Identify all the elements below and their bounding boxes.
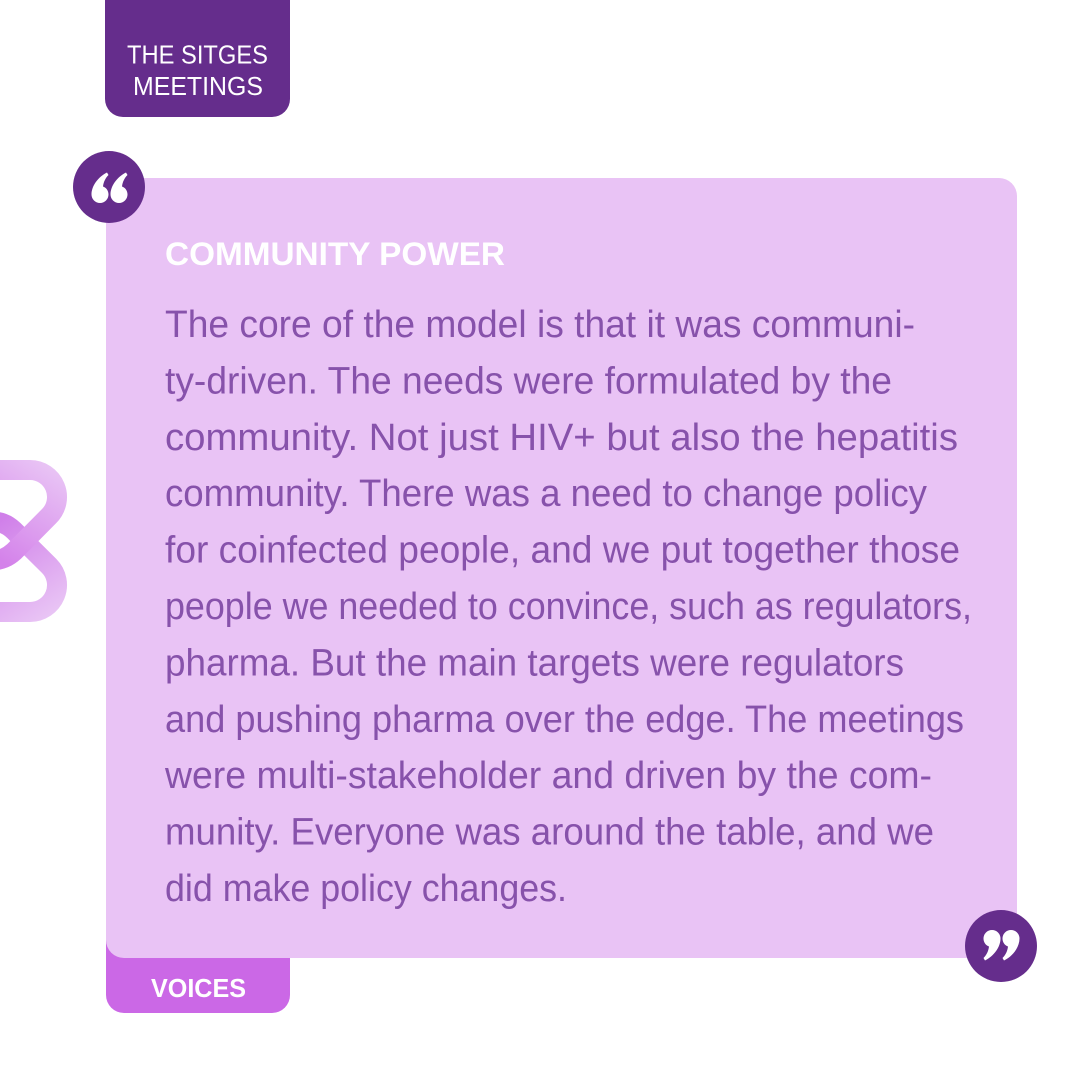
icon: opening quote <box>73 151 145 223</box>
quote text: pharma. But the main targets were regulators <box>165 642 904 684</box>
quote text: people we needed to convince, such as regulators, <box>165 586 972 628</box>
quote text: for coinfected people, and we put together those <box>165 530 960 572</box>
quote text: ty-driven. The needs were formulated by the <box>165 360 892 402</box>
tab: voices <box>106 930 290 1013</box>
tab: the sitges meetings: THE SITGES <box>127 40 268 70</box>
heading: COMMUNITY POWER <box>165 236 505 272</box>
quote text: community. Not just HIV+ but also the hepatitis <box>165 417 958 459</box>
icon: closing quote <box>965 910 1037 982</box>
tab: the sitges meetings: MEETINGS <box>133 71 263 101</box>
quote text: munity. Everyone was around the table, and we <box>165 812 934 854</box>
quote text: and pushing pharma over the edge. The meetings <box>165 699 964 741</box>
quote text: did make policy changes. <box>165 868 567 910</box>
quote text: The core of the model is that it was communi- <box>165 304 915 346</box>
quote text: were multi-stakeholder and driven by the com- <box>164 755 932 797</box>
panel: quote <box>106 178 1017 958</box>
tab: voices: VOICES <box>151 973 246 1003</box>
quote text: community. There was a need to change policy <box>165 473 927 515</box>
quote text <box>164 304 972 910</box>
tab: the sitges meetings <box>105 0 290 117</box>
icon: ribbon logo <box>0 470 57 612</box>
